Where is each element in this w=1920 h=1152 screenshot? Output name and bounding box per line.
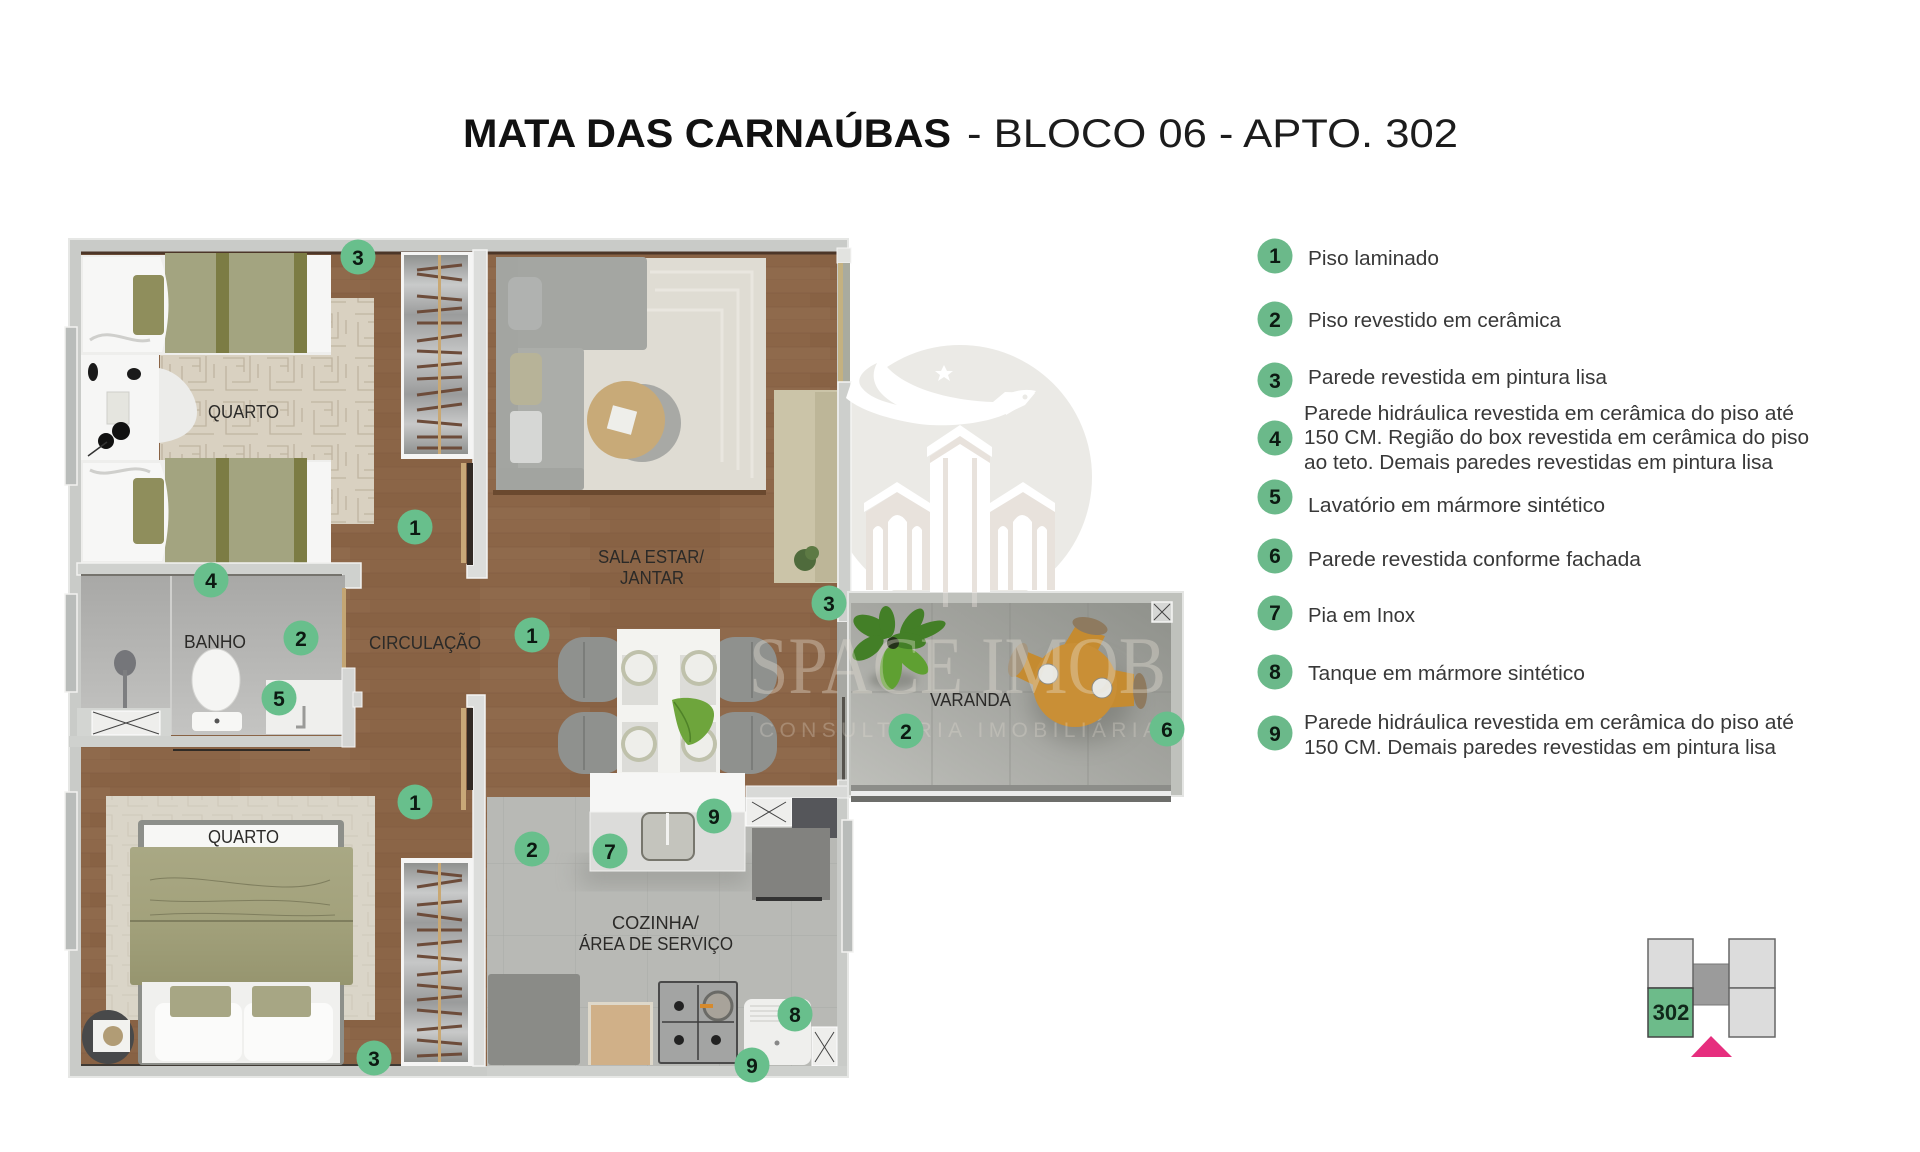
legend item 1 — [1258, 238, 1439, 274]
rocket swoosh — [846, 355, 1036, 425]
shaft — [812, 1027, 837, 1066]
outer walls — [69, 239, 848, 1077]
rug — [498, 258, 766, 490]
plan marker 9: 9 — [708, 806, 720, 829]
room labels: QUARTO — [208, 827, 279, 847]
legend item 5: Lavatório em mármore sintético — [1308, 495, 1605, 517]
panel: lower bedroom — [82, 796, 375, 1065]
legend item 6: Parede revestida conforme fachada — [1308, 549, 1642, 571]
counter shadow — [580, 860, 750, 884]
plan marker 8 — [778, 996, 812, 1032]
panel: floor plan — [69, 239, 851, 1077]
round table with chairs — [1004, 614, 1148, 742]
washing machine — [752, 828, 830, 901]
plan marker 4: 4 — [205, 570, 217, 593]
legend item 8: 8 — [1269, 661, 1281, 684]
rug — [106, 796, 375, 1020]
plan marker 6: 6 — [1161, 719, 1173, 742]
legend item 4 — [1258, 403, 1809, 474]
nightstand — [82, 1010, 134, 1064]
plan marker 7: 7 — [604, 841, 616, 864]
plan marker 3: 3 — [352, 247, 364, 270]
legend — [1258, 238, 1809, 759]
rug — [160, 298, 374, 524]
buildings — [864, 425, 1055, 607]
legend item 5 — [1258, 480, 1605, 517]
desk — [81, 355, 197, 460]
legend item 2: Piso revestido em cerâmica — [1308, 310, 1562, 332]
plan marker 4 — [194, 562, 228, 598]
legend item 8: Tanque em mármore sintético — [1308, 663, 1585, 685]
plan marker 5: 5 — [273, 688, 285, 711]
legend item 6: 6 — [1269, 545, 1281, 568]
laundry tank — [744, 999, 811, 1065]
toilet — [192, 649, 242, 731]
panel: kitchen and service area — [487, 773, 848, 1066]
plan marker 1: 1 — [409, 792, 421, 815]
plan marker 3 — [340, 240, 376, 274]
plan marker 3: 3 — [823, 593, 835, 616]
plan marker 8: 8 — [789, 1004, 801, 1027]
plant — [848, 605, 948, 691]
legend item 3: Parede revestida em pintura lisa — [1308, 367, 1608, 389]
service wall and shaft — [746, 786, 848, 838]
title: MATA DAS CARNAÚBAS — [463, 110, 951, 156]
panel: living and dining room — [493, 257, 837, 774]
plan marker 3 — [812, 586, 846, 620]
title: - BLOCO 06 - APTO. 302 — [967, 112, 1458, 156]
watermark: logo and company name: CONSULTORIA IMOBILIÁRIA — [759, 719, 1157, 742]
legend item 9: 9 — [1269, 723, 1281, 746]
lower interior wall and door — [461, 695, 485, 1066]
room labels: VARANDA — [930, 690, 1011, 710]
legend item 4: 4 — [1269, 428, 1281, 451]
title — [463, 110, 1458, 156]
room labels: ÁREA DE SERVIÇO — [579, 934, 733, 954]
shower head — [114, 650, 136, 708]
plan marker 9 — [696, 798, 732, 834]
plan marker 5 — [262, 680, 296, 716]
room labels: BANHO — [184, 632, 246, 652]
watermark logo: circle behind the plan — [852, 345, 1092, 591]
plan marker 2 — [888, 714, 924, 748]
panel: upper bedroom — [81, 253, 374, 564]
watermark: logo and company name: SPACE IMOB — [749, 620, 1166, 711]
shaft — [77, 708, 171, 738]
interior wall and door — [461, 250, 487, 578]
plan marker 1: 1 — [409, 517, 421, 540]
plan marker 1 — [514, 618, 550, 652]
legend item 9 — [1258, 712, 1794, 759]
bed 2 — [81, 458, 331, 564]
arrow: building orientation — [1691, 1036, 1732, 1057]
legend item 4: 150 CM. Região do box revestida em cerâmica do piso — [1304, 427, 1809, 449]
legend item 3: 3 — [1269, 370, 1281, 393]
legend item 9: 150 CM. Demais paredes revestidas em pintura lisa — [1304, 737, 1777, 759]
fridge — [488, 974, 580, 1065]
legend item 2: 2 — [1269, 309, 1281, 332]
right wall — [837, 248, 851, 798]
stove — [659, 982, 737, 1063]
legend item 6 — [1258, 538, 1642, 574]
block key diagram — [1648, 939, 1775, 1037]
washbasin — [266, 680, 342, 734]
plan marker 1 — [398, 784, 432, 820]
sofa — [496, 257, 647, 490]
plan marker 1 — [398, 510, 432, 544]
room labels: CIRCULAÇÃO — [369, 632, 481, 653]
legend item 5: 5 — [1269, 486, 1281, 509]
panel: balcony — [848, 592, 1183, 802]
plan marker 1: 1 — [526, 625, 538, 648]
legend item 1: Piso laminado — [1308, 248, 1439, 270]
legend item 7: 7 — [1269, 602, 1281, 625]
plan marker 2: 2 — [900, 721, 912, 744]
bottom wall edge — [487, 1066, 847, 1076]
counter and sink — [590, 773, 745, 871]
room labels: COZINHA/ — [612, 913, 699, 933]
plan marker 7 — [592, 834, 628, 868]
legend item 3 — [1258, 362, 1608, 398]
wood cabinet — [588, 1002, 653, 1065]
plan marker 9: 9 — [746, 1055, 758, 1078]
legend item 8 — [1258, 654, 1585, 690]
coffee table — [587, 381, 681, 462]
legend item 4: ao teto. Demais paredes revestidas em pintura lisa — [1304, 452, 1774, 474]
bed 1 — [81, 253, 331, 355]
panel: upper wardrobe — [401, 252, 473, 459]
room labels: SALA ESTAR/ — [598, 547, 704, 567]
double bed — [130, 820, 353, 1065]
plan marker 2: 2 — [295, 628, 307, 651]
plan marker 2 — [284, 620, 318, 656]
legend item 2 — [1258, 302, 1562, 336]
dining table — [558, 629, 777, 774]
legend item 7 — [1258, 596, 1415, 630]
legend item 7: Pia em Inox — [1308, 605, 1415, 627]
plan marker 3 — [356, 1040, 392, 1076]
legend item 9: Parede hidráulica revestida em cerâmica do piso até — [1304, 712, 1794, 734]
plan marker 2: 2 — [526, 839, 538, 862]
plan marker 2 — [514, 832, 550, 866]
room labels — [184, 402, 1011, 954]
plan marker 9 — [734, 1048, 770, 1082]
plan marker 6 — [1150, 712, 1184, 746]
TV unit — [774, 390, 837, 583]
plan marker 3: 3 — [368, 1048, 380, 1071]
shaft — [1152, 602, 1172, 622]
legend item 4: Parede hidráulica revestida em cerâmica do piso até — [1304, 403, 1794, 425]
wood floor — [81, 252, 837, 1066]
panel: lower wardrobe — [401, 858, 473, 1066]
panel: bathroom — [69, 575, 362, 751]
unit number: 302 — [1653, 1000, 1689, 1025]
legend item 1: 1 — [1269, 245, 1281, 268]
room labels: JANTAR — [620, 568, 684, 588]
wall between upper bedroom and bathroom — [77, 563, 361, 588]
left windows — [65, 327, 853, 952]
room labels: QUARTO — [208, 402, 279, 422]
watermark: logo and company name — [749, 355, 1166, 742]
